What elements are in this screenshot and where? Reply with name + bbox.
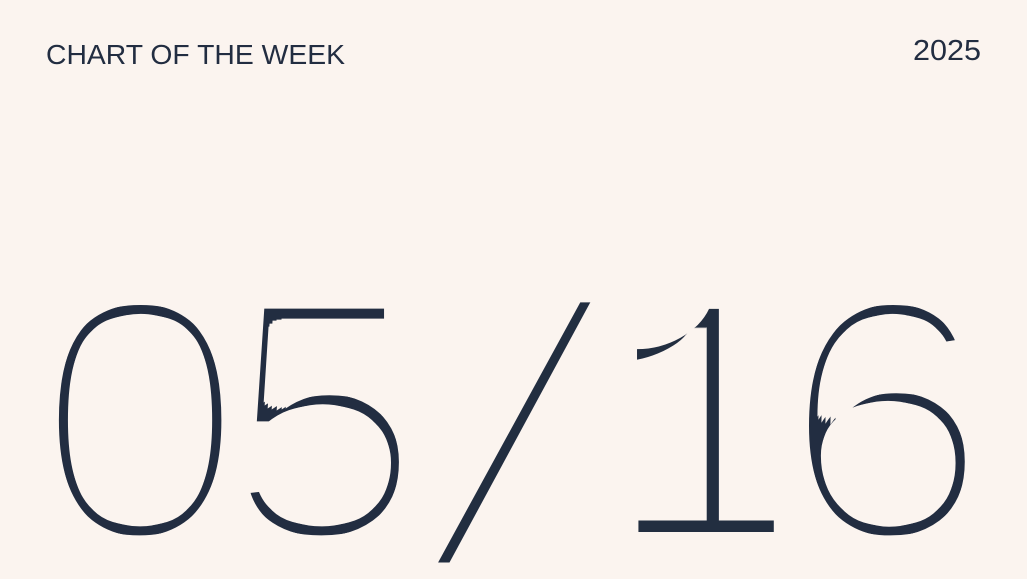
title: CHART OF THE WEEK <box>46 39 345 70</box>
big date <box>30 225 995 579</box>
year: 2025 <box>913 35 981 67</box>
